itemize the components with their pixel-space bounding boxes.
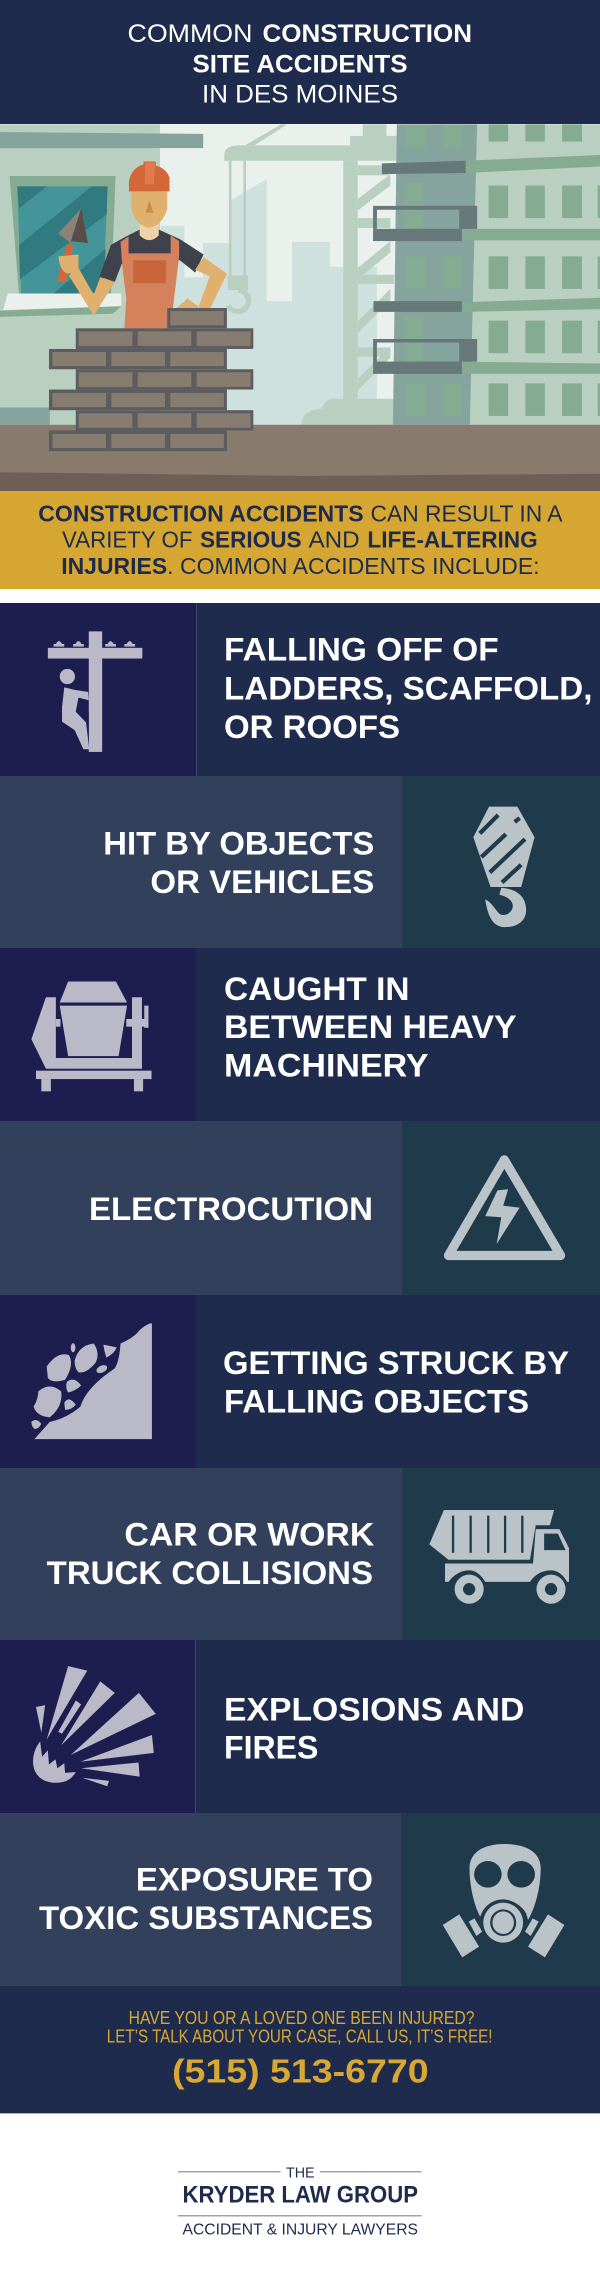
heading (47, 1517, 374, 1591)
icon: cement mixer (31, 982, 152, 1091)
row: caught in machinery (0, 948, 600, 1121)
distant city skyline (161, 179, 377, 425)
heading: CAUGHT IN (224, 971, 410, 1007)
title text: CONSTRUCTION (262, 20, 472, 48)
left building (0, 124, 203, 425)
high-rise under construction (373, 124, 600, 425)
heading (39, 1862, 373, 1936)
call to action text (107, 2008, 493, 2047)
heading: BETWEEN HEAVY (224, 1009, 517, 1045)
logo: The Kryder Law Group: KRYDER LAW GROUP (182, 2182, 418, 2209)
row: truck collisions (0, 1468, 600, 1640)
row: hit by objects (0, 776, 600, 948)
icon: explosion (33, 1666, 156, 1786)
title text: COMMON (128, 20, 252, 48)
heading: HIT BY OBJECTS (103, 826, 374, 862)
icon: lineman on pole (48, 631, 142, 752)
logo: The Kryder Law Group (178, 2166, 422, 2239)
heading (224, 971, 517, 1084)
intro text: . COMMON ACCIDENTS INCLUDE: (167, 553, 540, 579)
heading: TRUCK COLLISIONS (47, 1555, 373, 1591)
heading: LADDERS, SCAFFOLD, (224, 670, 592, 706)
heading: OR VEHICLES (150, 864, 374, 900)
intro text: SERIOUS (200, 527, 302, 553)
illustration: bricklayer at construction site (0, 124, 600, 492)
logo: The Kryder Law Group: THE (286, 2166, 315, 2182)
phone number: (515) 513-6770 (172, 2052, 429, 2089)
intro text (38, 501, 563, 579)
heading (224, 632, 592, 745)
icon: rockfall (31, 1323, 152, 1439)
title banner (0, 0, 600, 124)
intro text: CONSTRUCTION ACCIDENTS (38, 501, 364, 527)
icon: gas mask (443, 1844, 564, 1957)
gold intro panel (0, 491, 600, 589)
call to action panel (0, 1986, 600, 2114)
row: explosions (0, 1640, 600, 1813)
title text (128, 20, 472, 109)
row: falling objects (0, 1295, 600, 1468)
heading: FALLING OBJECTS (224, 1383, 529, 1419)
heading: CAR OR WORK (124, 1517, 374, 1553)
heading (224, 1692, 524, 1766)
heading: OR ROOFS (224, 709, 400, 745)
logo: The Kryder Law Group: ACCIDENT & INJURY LAWYERS (182, 2222, 418, 2239)
ground (0, 425, 600, 491)
heading: TOXIC SUBSTANCES (39, 1900, 373, 1936)
icon: crane hook (473, 807, 535, 927)
heading: EXPLOSIONS AND (224, 1692, 524, 1728)
brick wall (49, 308, 253, 451)
intro text: CAN RESULT IN A (370, 501, 563, 527)
heading (223, 1345, 569, 1419)
worker (57, 161, 227, 328)
title text: IN DES MOINES (202, 81, 398, 109)
title text: SITE ACCIDENTS (192, 51, 408, 79)
icon: dump truck (429, 1510, 569, 1604)
row: electrocution (0, 1121, 600, 1295)
call to action text: HAVE YOU OR A LOVED ONE BEEN INJURED? (129, 2008, 474, 2028)
row: falling (0, 603, 600, 776)
icon: high voltage warning (448, 1160, 561, 1255)
crane (224, 124, 397, 425)
intro text: VARIETY OF (62, 527, 192, 553)
intro text: INJURIES (61, 553, 167, 579)
heading: FALLING OFF OF (224, 632, 499, 668)
heading: GETTING STRUCK BY (223, 1345, 569, 1381)
heading: EXPOSURE TO (136, 1862, 373, 1898)
row: toxic substances (0, 1813, 600, 1986)
heading: FIRES (224, 1730, 318, 1766)
intro text: LIFE-ALTERING (367, 527, 538, 553)
heading (103, 826, 374, 900)
intro text: AND (308, 527, 360, 553)
heading: ELECTROCUTION (89, 1191, 373, 1227)
call to action text: LET’S TALK ABOUT YOUR CASE, CALL US, IT’S FREE! (107, 2027, 493, 2047)
heading: MACHINERY (224, 1048, 429, 1084)
